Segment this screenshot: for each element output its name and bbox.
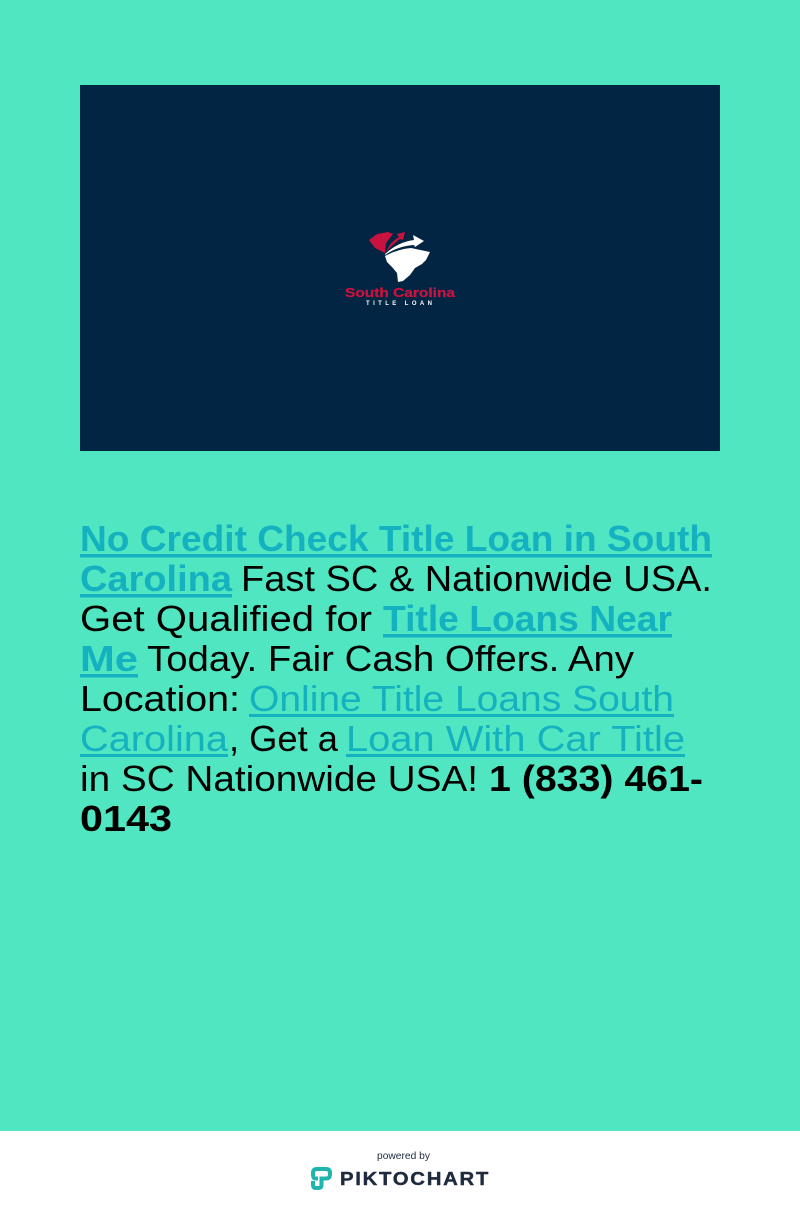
line 7: in SC Nationwide USA! — [80, 758, 478, 799]
logo name: South Carolina — [345, 285, 456, 300]
line 7: 1 (833) 461- — [489, 758, 703, 799]
line 5: Online Title Loans South — [249, 678, 674, 719]
line 4: Me — [80, 638, 138, 679]
panel: navy logo banner — [80, 85, 720, 451]
line 6: , Get a — [229, 718, 339, 759]
line 5 — [80, 678, 674, 719]
icon: South Carolina map logo — [369, 232, 430, 282]
line 4: Today. Fair Cash Offers. Any — [147, 638, 634, 679]
line 3: Get Qualified for — [80, 598, 372, 639]
line 6: Loan With Car Title — [346, 718, 685, 759]
powered by label: powered by — [377, 1151, 430, 1162]
line 5: Location: — [80, 678, 240, 719]
line 3: Title Loans Near — [383, 598, 672, 639]
line 6 — [80, 718, 685, 759]
icon: Piktochart logo mark — [313, 1169, 330, 1188]
text block: title loan description — [80, 518, 712, 839]
line 8: 0143 — [80, 798, 172, 839]
footer: powered by Piktochart — [0, 1131, 800, 1211]
logo tagline: TITLE LOAN — [366, 301, 432, 307]
line 1: No Credit Check Title Loan in South — [80, 518, 712, 559]
Piktochart wordmark: PIKTOCHART — [340, 1169, 490, 1189]
line 2: Carolina — [80, 558, 233, 599]
line 6: Carolina — [80, 718, 229, 759]
line 2: Fast SC & Nationwide USA. — [241, 558, 712, 599]
line 3 — [80, 598, 672, 639]
line 7 — [80, 758, 703, 799]
